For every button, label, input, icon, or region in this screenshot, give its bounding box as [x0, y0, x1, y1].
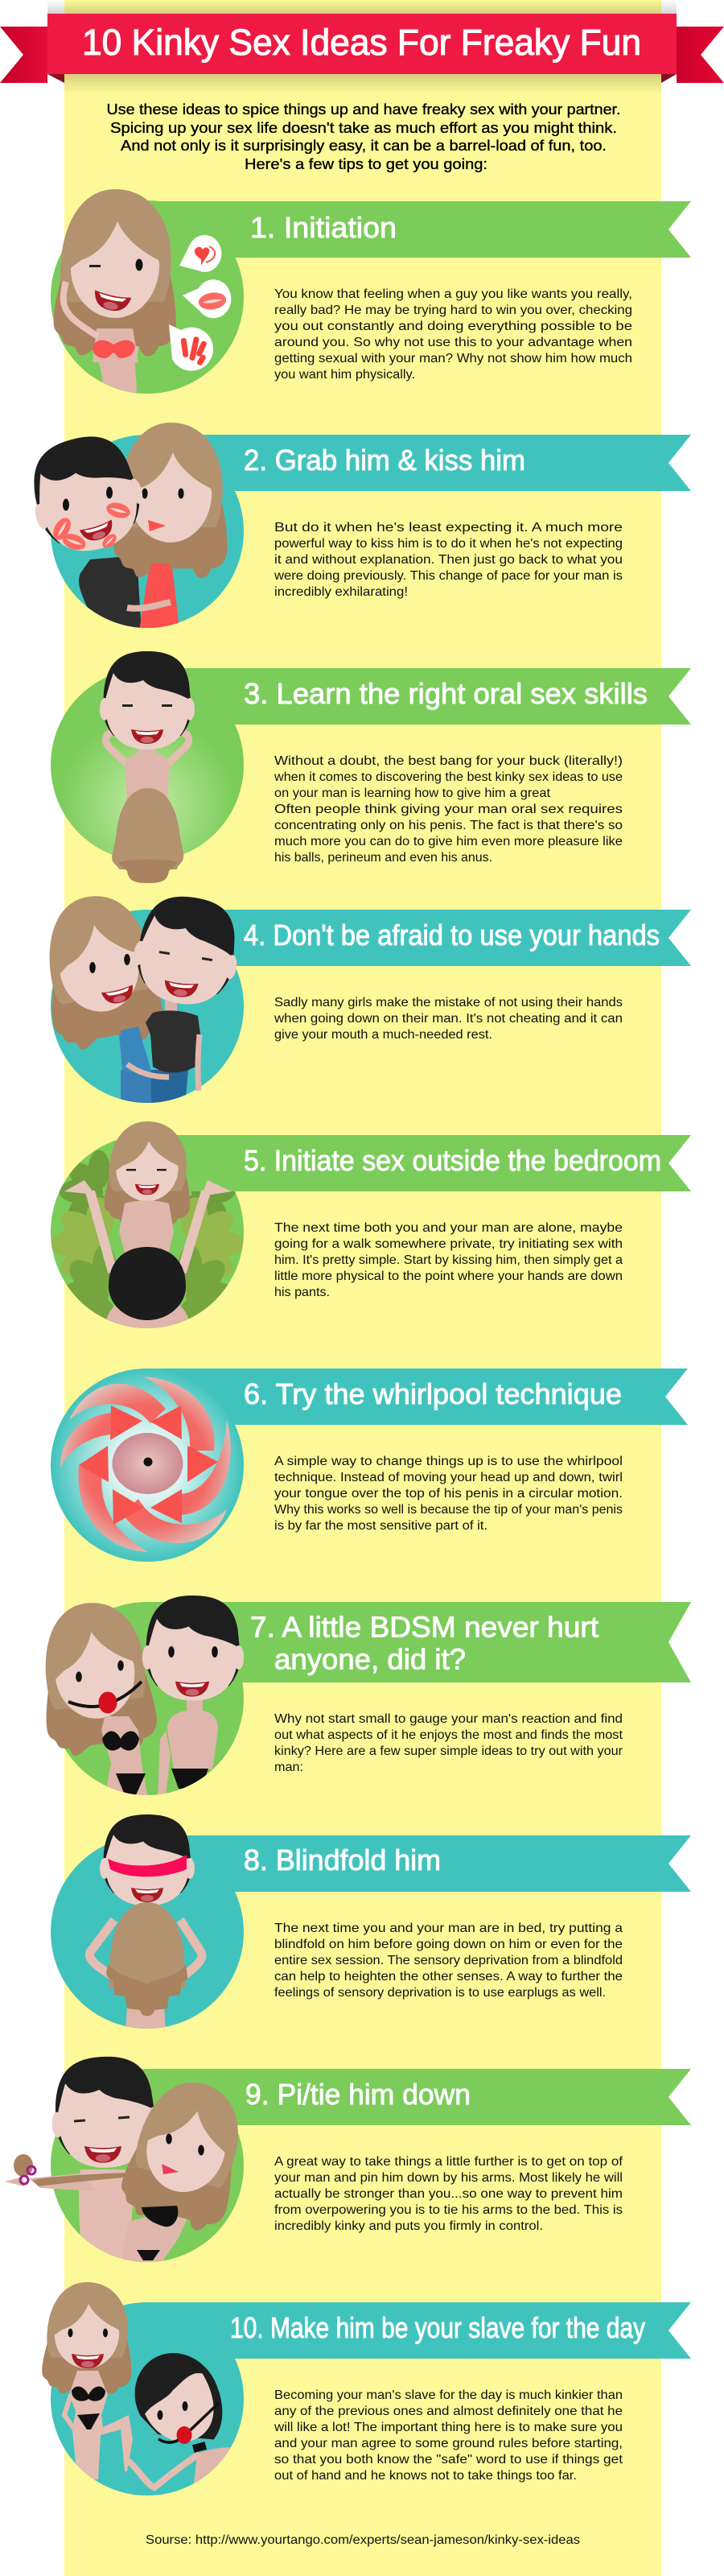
body text 8: blindfold on him before going down on him or even for the — [274, 1938, 623, 1951]
heading 4: 4. Don't be afraid to use your hands — [244, 919, 660, 952]
body text 3: Without a doubt, the best bang for your buck (literally!) — [274, 754, 623, 768]
illustration: winking woman — [54, 189, 231, 398]
section 1: initiation — [51, 189, 691, 398]
body text 1 — [274, 287, 632, 382]
tied arm — [5, 2154, 133, 2191]
illustration: couple with gag — [31, 1596, 244, 1799]
body text 5: little more physical to the point where your hands are down — [274, 1269, 623, 1283]
heading 3: 3. Learn the right oral sex skills — [244, 677, 648, 710]
section 4: use your hands — [32, 887, 691, 1107]
body text 10: any of the previous ones and almost definitely one that he — [274, 2405, 623, 2418]
heading 6: 6. Try the whirlpool technique — [244, 1377, 622, 1410]
body text 3: when it comes to discovering the best kinky sex ideas to use — [274, 770, 623, 784]
banner 4 — [147, 910, 691, 966]
body text 9 — [274, 2155, 623, 2233]
body text 5: The next time both you and your man are alone, maybe — [274, 1221, 623, 1235]
body text 1: getting sexual with your man? Why not show him how much — [274, 352, 632, 365]
blindfold — [108, 1855, 187, 1876]
speech bubbles — [169, 235, 231, 371]
body text 2: were doing previously. This change of pace for your man is — [274, 569, 623, 583]
woman's hair from behind — [106, 1902, 187, 2016]
body text 7: kinky? Here are a few super simple ideas to try out with your — [274, 1744, 623, 1758]
circle 6 — [51, 1368, 244, 1562]
illustration: swirling arrows — [60, 1377, 231, 1552]
illustration: smiling man and woman's hair from behind — [100, 651, 195, 883]
circle 8 — [51, 1835, 244, 2029]
intro text — [106, 101, 621, 172]
section 7: a little BDSM — [31, 1596, 691, 1799]
body text 1: really bad? He may be trying hard to win you over, checking — [274, 303, 632, 317]
body text 10: so that you both know the "safe" word to use if things get — [274, 2453, 623, 2467]
banner 8 — [147, 1835, 691, 1892]
body text 2: it and without explanation. Then just go back to what you — [274, 553, 623, 567]
body text 4: give your mouth a much-needed rest. — [274, 1028, 492, 1042]
body text 3: much more you can do to give him even more pleasure like — [274, 835, 623, 848]
section 2: grab him and kiss him — [19, 423, 691, 636]
banner 9 — [147, 2069, 691, 2125]
heading 8: 8. Blindfold him — [244, 1843, 441, 1876]
intro text: Spicing up your sex life doesn't take as much effort as you might think. — [110, 119, 617, 136]
circle 3 — [51, 668, 244, 861]
section 6: whirlpool — [51, 1368, 688, 1562]
shadow below title ribbon — [64, 74, 661, 93]
body text 8: can help to heighten the other senses. A way to further the — [274, 1970, 623, 1984]
banner 6 — [147, 1368, 688, 1425]
body text 10: out of hand and he knows not to take things too far. — [274, 2469, 577, 2483]
body text 6: A simple way to change things up is to use the whirlpool — [274, 1455, 623, 1468]
banner 7 — [147, 1602, 691, 1682]
illustration: pink centre — [113, 1433, 183, 1494]
body text 5: him. It's pretty simple. Start by kissing him, then simply get a — [274, 1253, 623, 1267]
body text 6 — [274, 1455, 623, 1533]
heading 7: 7. A little BDSM never hurt — [250, 1610, 599, 1644]
title ribbon — [0, 14, 724, 83]
body text 5 — [274, 1221, 623, 1299]
body text 2: powerful way to kiss him is to do it when he's not expecting — [274, 537, 623, 551]
banner 1 — [147, 201, 691, 258]
banner 5 — [147, 1135, 691, 1191]
section 8: blindfold — [51, 1814, 691, 2033]
heading 1: 1. Initiation — [250, 211, 397, 244]
shadow above title ribbon — [47, 0, 677, 14]
body text 6: is by far the most sensitive part of it. — [274, 1519, 487, 1533]
body text 2: incredibly exhilarating! — [274, 585, 408, 599]
illustration: woman with raised arms and man from behind — [64, 1121, 232, 1328]
body text 5: going for a walk somewhere private, try initiating sex with — [274, 1237, 623, 1251]
body text 1: You know that feeling when a guy you like wants you really, — [274, 287, 632, 301]
heading 7 — [250, 1610, 599, 1676]
illustration: man pinned and woman — [5, 2054, 254, 2266]
body text 1: around you. So why not use this to your advantage when — [274, 336, 632, 349]
body text 9: incredibly kinky and puts you firmly in control. — [274, 2219, 543, 2233]
section 10: slave for the day — [42, 2282, 691, 2496]
body text 10: will like a lot! The important thing here is to make sure you — [274, 2421, 623, 2434]
intro text: Use these ideas to spice things up and have freaky sex with your partner. — [106, 101, 621, 118]
heading 5: 5. Initiate sex outside the bedroom — [244, 1144, 661, 1177]
circle 7 — [51, 1602, 244, 1795]
body text 10 — [274, 2388, 623, 2483]
illustration: standing woman and kneeling man — [42, 2282, 237, 2491]
section 3: oral skills — [51, 651, 691, 883]
body text 9: from overpowering you is to tie his arms to the bed. This is — [274, 2203, 623, 2217]
body text 3: on your man is learning how to give him a great — [274, 786, 551, 800]
body text 3: concentrating only on his penis. The fact is that there's so — [274, 819, 623, 832]
intro text: Here's a few tips to get you going: — [245, 155, 487, 172]
body text 8: The next time you and your man are in bed, try putting a — [274, 1922, 623, 1935]
body text 6: technique. Instead of moving your head up and down, twirl — [274, 1471, 623, 1484]
body text 4: when going down on their man. It's not cheating and it can — [274, 1012, 623, 1026]
source line: Sourse: http://www.yourtango.com/experts/sean-jameson/kinky-sex-ideas — [146, 2533, 580, 2547]
body text 5: his pants. — [274, 1286, 330, 1299]
body text 9: A great way to take things a little further is to get on top of — [274, 2155, 623, 2169]
body text 10: and your man agree to some ground rules before starting, — [274, 2437, 623, 2450]
banner 2 — [147, 435, 691, 491]
body text 9: actually be stronger than you...so one way to prevent him — [274, 2187, 623, 2201]
body text 6: your tongue over the top of his penis in a circular motion. — [274, 1487, 623, 1501]
body text 8: entire sex session. The sensory deprivation from a blindfold — [274, 1954, 623, 1967]
title: 10 Kinky Sex Ideas For Freaky Fun — [82, 22, 641, 63]
body text 7: man: — [274, 1761, 303, 1774]
body text 3: his balls, perineum and even his anus. — [274, 851, 492, 865]
illustration: blindfolded man — [89, 1814, 202, 2033]
section 9: pin or tie him down — [5, 2054, 691, 2266]
intro text: And not only is it surprisingly easy, it can be a barrel-load of fun, too. — [121, 137, 607, 154]
body text 4: Sadly many girls make the mistake of not using their hands — [274, 996, 623, 1009]
heading 7: anyone, did it? — [274, 1642, 466, 1676]
leaves — [51, 1150, 243, 1323]
body text 7: out what aspects of it he enjoys the most and finds the most — [274, 1728, 623, 1742]
body text 7 — [274, 1712, 623, 1774]
heading 2: 2. Grab him & kiss him — [244, 444, 525, 477]
circle 10 — [51, 2302, 244, 2496]
banner 3 — [147, 668, 691, 724]
body text 2: But do it when he's least expecting it. A much more — [274, 521, 623, 535]
heading 9: 9. Pi/tie him down — [245, 2078, 471, 2111]
circle 4 — [51, 910, 244, 1103]
body text 1: you out constantly and doing everything possible to be — [274, 320, 632, 333]
illustration: embracing couple — [50, 896, 237, 1103]
body text 10: Becoming your man's slave for the day is much kinkier than — [274, 2388, 623, 2402]
heading 10: 10. Make him be your slave for the day — [230, 2311, 645, 2344]
banner 10 — [147, 2302, 691, 2359]
body text 6: Why this works so well is because the tip of your man's penis — [274, 1503, 623, 1517]
circle 5 — [51, 1135, 244, 1328]
body text 8: feelings of sensory deprivation is to use earplugs as well. — [274, 1986, 606, 2000]
body text 3 — [274, 754, 623, 865]
illustration: couple with kiss marks — [34, 423, 228, 628]
circle 1 — [51, 200, 244, 394]
section 5: outside the bedroom — [50, 1121, 691, 1348]
body text 3: Often people think giving your man oral sex requires — [274, 803, 623, 816]
circle 9 — [51, 2069, 244, 2262]
body text 7: Why not start small to gauge your man's reaction and find — [274, 1712, 623, 1726]
body text 8 — [274, 1922, 623, 2000]
body text 2 — [274, 521, 623, 599]
body text 9: your man and pin him down by his arms. Most likely he will — [274, 2171, 623, 2185]
body text 4 — [274, 996, 623, 1042]
circle 2 — [51, 435, 244, 628]
body text 1: you want him physically. — [274, 368, 415, 382]
